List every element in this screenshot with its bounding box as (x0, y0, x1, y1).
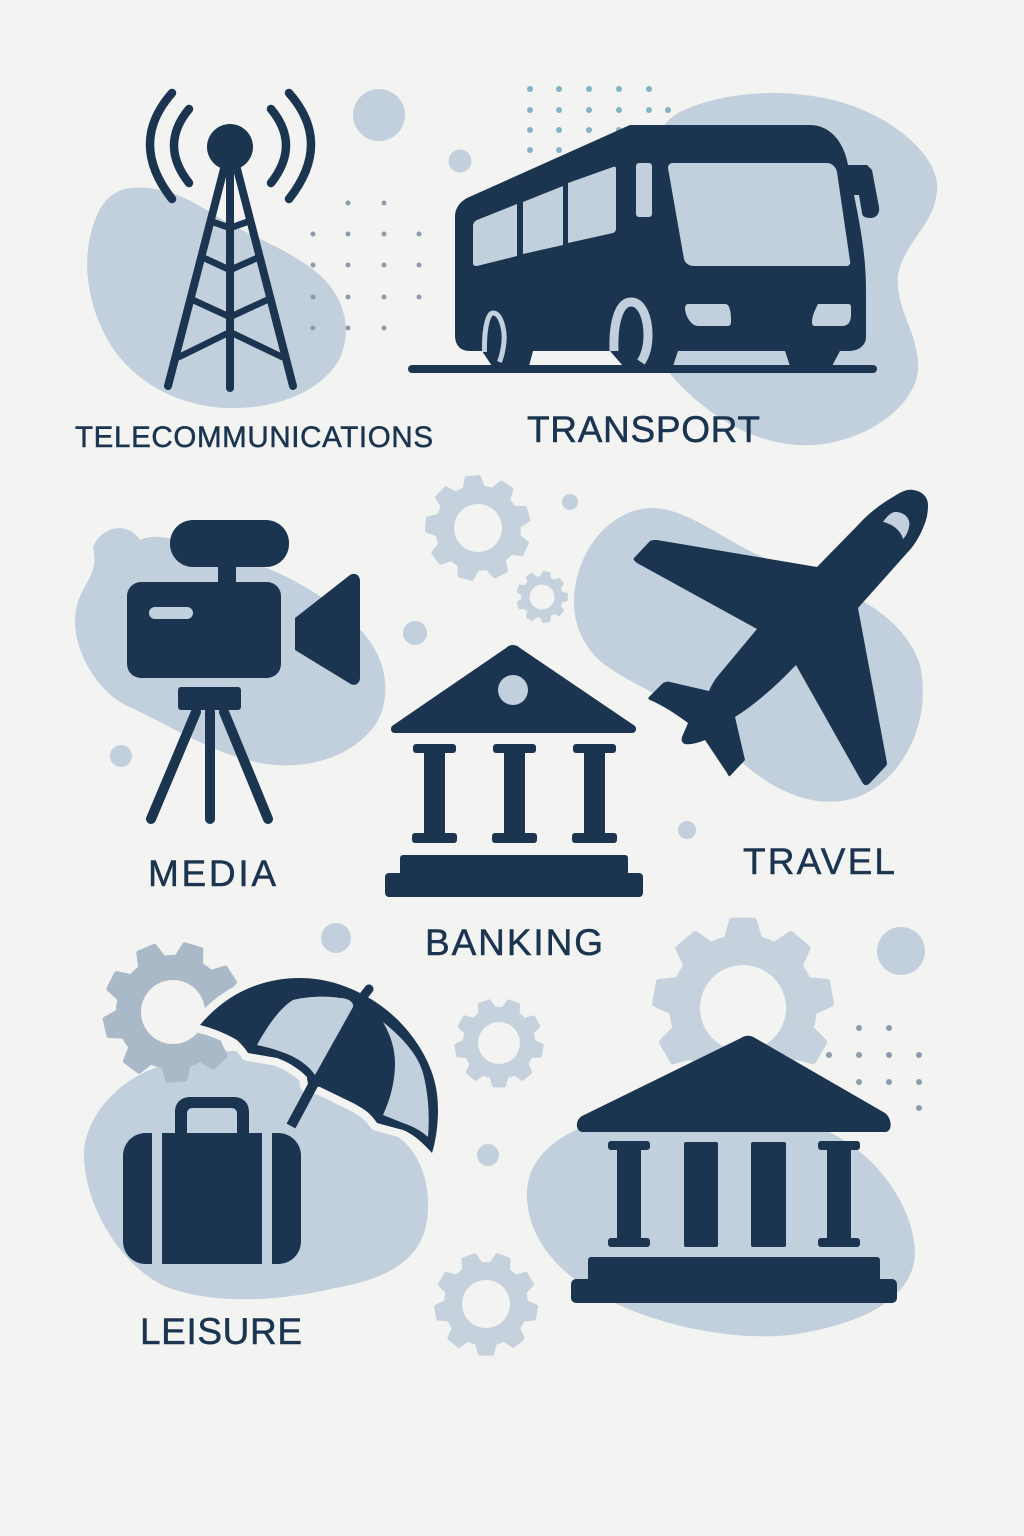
panel: transport (408, 93, 937, 450)
label: media: MEDIA (148, 853, 276, 894)
dot: media left (110, 745, 132, 767)
icon: radio tower (150, 93, 311, 388)
icon: video camera (127, 520, 360, 819)
panel: media (75, 520, 385, 894)
dot: small top circle (448, 150, 472, 172)
dot: center (403, 621, 427, 645)
gear: top center small (518, 572, 567, 622)
panel: large bank (527, 1036, 915, 1336)
label: leisure: LEISURE (140, 1311, 302, 1352)
blob: travel background (574, 508, 923, 802)
gear: center lower (450, 993, 549, 1093)
panel: telecommunications (75, 93, 433, 454)
dot: lower center (477, 1144, 499, 1166)
dot: gear side (562, 494, 578, 510)
panel: banking (385, 645, 643, 963)
label: telecommunications: TELECOMMUNICATIONS (75, 421, 433, 454)
panel: leisure (84, 937, 438, 1352)
dot: travel lower (678, 821, 696, 839)
label: travel: TRAVEL (743, 841, 895, 882)
label: banking: BANKING (425, 922, 603, 963)
blob: media background (75, 528, 385, 765)
panel: travel (574, 490, 928, 882)
dot: large top circle (353, 89, 405, 141)
icon: bank small (385, 645, 643, 897)
dots: transport dot grid (527, 86, 671, 153)
icon: beach umbrella (200, 978, 438, 1153)
blob: transport background (632, 93, 937, 445)
icon: bus (408, 125, 879, 373)
label: transport: TRANSPORT (527, 409, 760, 450)
gear: top center large (416, 465, 541, 591)
blob: large bank background (527, 1110, 915, 1336)
icon: large bank (571, 1036, 897, 1303)
icon: airplane (634, 490, 928, 785)
gear: lower right large (644, 907, 844, 1109)
blob: telecommunications background (87, 188, 346, 408)
dot: lower right (877, 927, 925, 975)
dots: lower right dot grid (826, 1025, 922, 1111)
dot: lower left of center (321, 923, 351, 953)
blob: leisure background (84, 1051, 428, 1299)
gear: bottom center (429, 1246, 544, 1362)
gear: leisure large (99, 937, 248, 1088)
icon: suitcase (123, 1097, 301, 1264)
dots: telecom dot grid (310, 200, 422, 330)
